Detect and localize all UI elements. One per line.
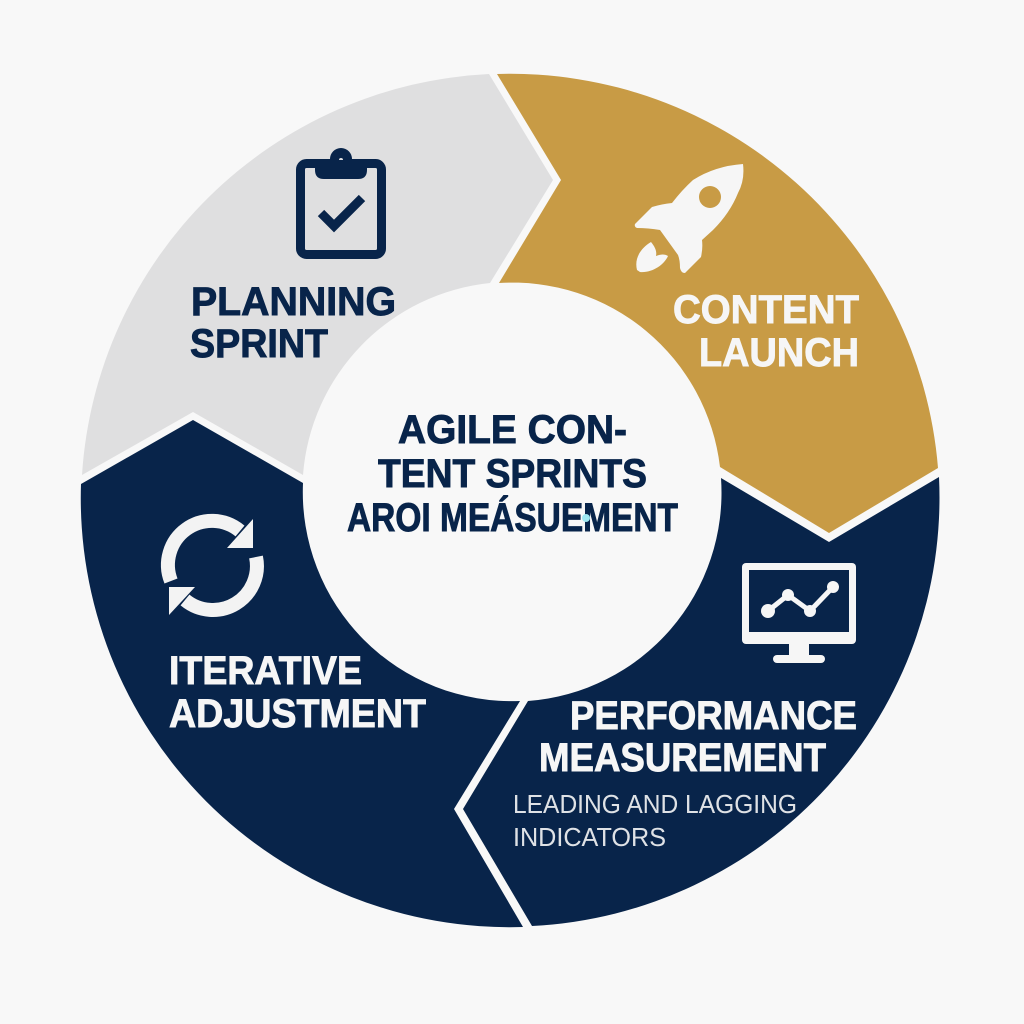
center title: TENT SPRINTS bbox=[378, 452, 647, 496]
heading: content launch: CONTENT bbox=[673, 288, 859, 332]
icon: clipboard with check bbox=[300, 148, 382, 254]
heading: content launch: LAUNCH bbox=[699, 331, 859, 375]
heading: iterative adjustment bbox=[169, 649, 426, 736]
center title: AROI MEÁSUEMENT bbox=[347, 495, 678, 540]
panel: planning sprint bbox=[82, 74, 553, 475]
heading: planning sprint: PLANNING bbox=[191, 280, 396, 324]
text: leading and lagging indicators: INDICATORS bbox=[513, 822, 666, 852]
heading: planning sprint: SPRINT bbox=[190, 322, 328, 366]
icon: refresh arrows bbox=[168, 519, 257, 615]
segment: performance measurement arrow bbox=[463, 477, 939, 926]
panel: content launch bbox=[497, 74, 938, 533]
icon: monitor with line chart bbox=[742, 563, 856, 663]
center title bbox=[347, 408, 678, 540]
text: leading and lagging indicators bbox=[513, 789, 797, 852]
segment: content launch arrow bbox=[497, 74, 938, 533]
heading: performance measurement bbox=[539, 694, 857, 780]
center title: AGILE CON- bbox=[398, 408, 627, 452]
icon: rocket bbox=[635, 164, 743, 273]
heading: content launch bbox=[673, 288, 859, 375]
text: leading and lagging indicators: LEADING AND LAGGING bbox=[513, 789, 797, 819]
segment: planning sprint arrow bbox=[82, 74, 553, 475]
heading: performance measurement: PERFORMANCE bbox=[570, 694, 857, 738]
heading: iterative adjustment: ADJUSTMENT bbox=[169, 692, 426, 736]
heading: iterative adjustment: ITERATIVE bbox=[169, 649, 362, 693]
panel: performance measurement bbox=[463, 477, 939, 926]
segment: iterative adjustment arrow bbox=[81, 420, 523, 927]
heading: planning sprint bbox=[190, 280, 396, 366]
heading: performance measurement: MEASUREMENT bbox=[539, 736, 826, 780]
panel: iterative adjustment bbox=[81, 420, 523, 927]
